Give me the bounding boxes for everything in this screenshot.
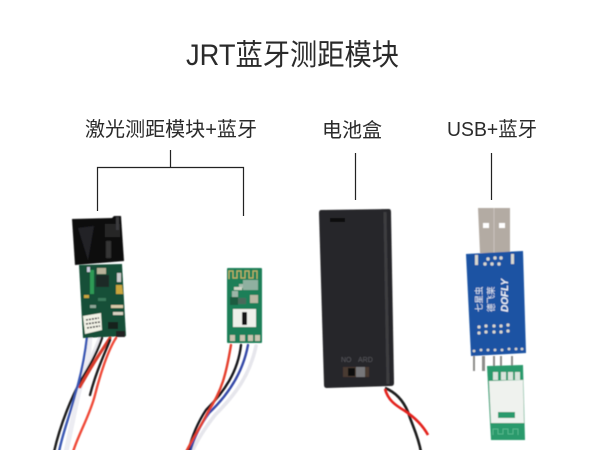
board printed chinese text two: 德飞莱 [486, 286, 496, 312]
bracket connector: laser module and bluetooth [98, 150, 244, 216]
label: battery box: 电池盒 [322, 119, 382, 142]
connector line: USB [490, 153, 492, 200]
label: USB + bluetooth: USB+蓝牙 [447, 118, 537, 141]
header pins [473, 356, 513, 371]
connector line: battery box [354, 153, 356, 200]
battery wires [385, 388, 428, 450]
green board [227, 268, 262, 343]
label: laser module + bluetooth: 激光测距模块+蓝牙 [85, 118, 257, 141]
module wires [186, 345, 256, 450]
antenna trace [229, 271, 257, 279]
module wires [54, 337, 116, 450]
bluetooth module [186, 268, 262, 450]
battery box [319, 209, 428, 450]
board holes [473, 254, 523, 352]
white barcode label [83, 313, 102, 334]
bluetooth board [487, 365, 525, 440]
title: JRT蓝牙测距模块 [186, 39, 399, 72]
power switch [343, 367, 369, 377]
switch markings: NO [341, 357, 352, 364]
laser rangefinder module [54, 216, 126, 450]
board printed brand: DOFLY [500, 278, 511, 312]
board components [230, 280, 260, 341]
blue board [466, 251, 526, 356]
black laser housing [72, 216, 124, 265]
board printed chinese text: 七星虫 [474, 286, 484, 312]
USB bluetooth adapter [466, 208, 526, 440]
switch markings off: ARD [358, 357, 373, 364]
USB metal connector [478, 208, 510, 253]
case side highlight [385, 212, 388, 384]
black case [319, 209, 394, 388]
case slot [330, 218, 345, 222]
green circuit board [79, 264, 126, 338]
board components [84, 267, 125, 337]
